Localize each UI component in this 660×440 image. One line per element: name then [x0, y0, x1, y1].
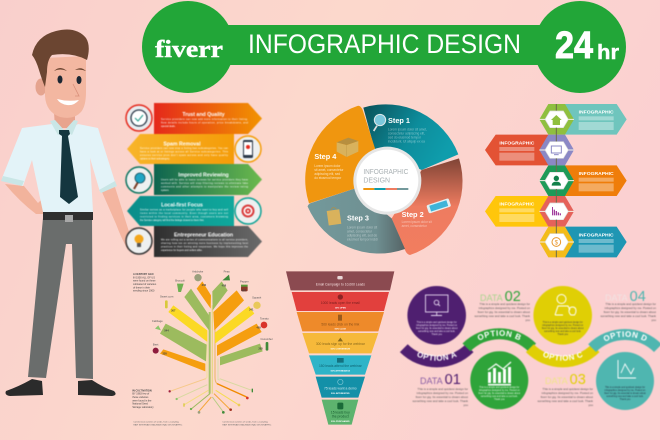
data 02: something new and take a cool look. Thank: [474, 314, 531, 318]
circle: option B: This is a simple and quickest design for: [479, 386, 520, 389]
circle: option D: [596, 352, 654, 410]
data 04: DATA 04: [605, 289, 646, 305]
vegetable labels: Beet: [153, 342, 159, 346]
circle: option A: fiverr for gig. Its essential to dream about: [416, 327, 458, 330]
step 1 text: [388, 116, 427, 144]
branch values: 544: [164, 328, 169, 332]
center disc: INFOGRAPHIC: [363, 169, 408, 176]
funnel level 7: 15 leads buy: [331, 410, 350, 414]
neck: [54, 112, 75, 128]
funnel level 2: 1000 leads open the email: [321, 301, 360, 305]
right arm: [102, 187, 130, 250]
banner: entrepreneur education: sharing how-tos on winning more business by implementing best: [161, 242, 248, 245]
vegetable icons: [153, 274, 268, 414]
data 01: [412, 372, 469, 407]
funnel level 2: [292, 292, 389, 311]
data 01: infographics designed by me. Posted on: [417, 391, 468, 395]
data 02: This is a simple and quickest design for: [480, 302, 530, 306]
icon: monitor search: [426, 295, 448, 316]
data 02: DATA 02: [480, 289, 521, 305]
step 1 text: incididunt. Ut aliquip ex ea: [388, 140, 425, 144]
icon: dollar coin: $: [555, 240, 559, 246]
banner: improved reviewing: Improved Reviewing: [178, 172, 229, 178]
data 04: This is a simple and quickest design for: [606, 302, 656, 306]
circle: option C: This is a simple and quickest design for: [543, 321, 583, 324]
face: [45, 56, 86, 118]
branch values: 408: [222, 284, 227, 288]
banner: entrepreneur education: practices in their listing and responses. We hope this improves the: [161, 246, 249, 248]
annotation: in the population: were found in the: [132, 399, 152, 402]
step 3 text: [347, 214, 378, 241]
annotation: in the population: those varieties: [132, 396, 149, 399]
funnel level 4: [302, 333, 378, 353]
funnel level 4: 60% CONVERSION: [331, 348, 350, 350]
branch values: 341: [249, 308, 254, 312]
branch values: 307: [171, 308, 176, 312]
banner: local-first focus: restricted to finding services in their area, customers browsing: [140, 216, 229, 218]
icon: monitor: [551, 146, 561, 155]
funnel level 5: [309, 355, 371, 375]
vegetable labels: Cabbage: [152, 319, 163, 323]
circle: option A: This is a simple and quickest design for: [417, 321, 457, 324]
data 01: fiverr for gig. Its essential to dream about: [416, 395, 468, 399]
annotation: in the population: [132, 389, 154, 409]
segment: step 1: [363, 104, 458, 170]
banner: improved reviewing: [154, 164, 262, 195]
row 3: person: INFOGRAPHIC: [579, 171, 614, 177]
banner: spam removal: [127, 134, 234, 164]
step 4 text: do eiusmod tempor: [314, 176, 341, 180]
banner: local-first focus: items within the local community. Even though users are not: [140, 212, 228, 215]
eyes and brows: [54, 68, 86, 84]
step 2 text: [402, 210, 432, 228]
24hr badge: [555, 25, 619, 67]
head: [32, 30, 89, 118]
circle: option D: Thank you: [620, 399, 631, 401]
smile: [57, 99, 79, 105]
circle: option A: Thank you: [431, 334, 443, 336]
banner: improved reviewing: comments and other attempts to manipulate the review rating: [161, 186, 249, 188]
icon: smartphone: [426, 198, 451, 214]
data 02: infographics designed by me. Posted on: [479, 306, 530, 310]
step 1 text: Lorem ipsum dolor sit amet,: [388, 128, 427, 132]
branches: [160, 281, 263, 371]
icon: magnifier: [126, 167, 152, 193]
funnel level 1: Email Campaign to 10,000 Leads: [316, 282, 365, 286]
icon: target: [235, 198, 261, 224]
title: INFOGRAPHIC DESIGN: [248, 29, 521, 59]
banner: spam removal: have a look at or listings across all Service subcategories. This: [140, 150, 229, 154]
data 03: fiverr for gig. Its essential to dream about: [541, 395, 593, 399]
circle: option B: infographics designed by me. Posted on: [479, 389, 520, 392]
banner: improved reviewing: system.: [161, 189, 170, 192]
funnel level 6: [316, 377, 365, 398]
circle: option A: [407, 286, 466, 345]
step 3 text: Step 3: [347, 214, 369, 223]
icon: line chart: [618, 360, 636, 378]
banner: entrepreneur education: Entrepreneur Education: [174, 232, 233, 238]
panel: option circles: [400, 285, 660, 411]
circle: option C: Thank you: [557, 334, 569, 336]
option B band: [462, 328, 536, 352]
vegetable labels: Artichoke: [192, 270, 204, 274]
banner: spam removal: options to their subcategory.: [140, 158, 170, 160]
banner: trust and quality: [154, 103, 262, 134]
banner: spam removal: ensures service pros don't spam across and only have quality: [140, 154, 229, 157]
row 1: home: INFOGRAPHIC: [579, 110, 614, 116]
data 01: you: [463, 403, 468, 407]
branch values: 497: [242, 288, 247, 292]
step 1 text: Step 1: [388, 116, 410, 125]
option A band: [400, 344, 474, 368]
banner: spam removal: Spam Removal: [163, 142, 201, 148]
center disc: [353, 147, 421, 215]
shirt: [2, 124, 116, 212]
hair: [32, 30, 89, 87]
header bar shape: [142, 1, 626, 93]
trunk: [205, 305, 220, 394]
row 4: chart: INFOGRAPHIC: [499, 202, 535, 208]
data 03: [537, 372, 594, 407]
segment: step 3: [308, 188, 405, 253]
banner: trust and quality: special deals.: [161, 125, 176, 128]
annotation: a century ago: [133, 273, 157, 293]
icon: shopping bag: [327, 208, 341, 225]
data 01: This is a simple and quickest design for: [418, 387, 468, 391]
funnel level 5: 50% ATTENDANCE: [331, 369, 351, 372]
row 2: monitor: INFOGRAPHIC: [499, 140, 535, 146]
circle: option D: This is a simple and quickest design for: [605, 386, 645, 389]
step 3 text: eiusmod tempor incidi: [347, 237, 378, 241]
funnel level 3: 50% CLICK: [335, 328, 347, 330]
circle: option D: fiverr for gig. Its essential to dream about: [604, 392, 646, 395]
icon: person: [552, 176, 561, 186]
data 01: DATA 01: [420, 372, 461, 388]
step 4 text: [314, 152, 343, 180]
banner: local-first focus: Similar serves as a marketplace for people who want to buy and sell: [140, 208, 228, 212]
circle: option D: infographics designed by me. Posted on: [605, 389, 646, 392]
step 2 text: Lorem ipsum dolor sit: [402, 220, 432, 224]
icon: light bulb: [126, 228, 152, 254]
step 3 text: adipiscing elit, sed do: [347, 233, 377, 237]
icon: phone: [235, 136, 261, 162]
banner: local-first focus: Local-first Focus: [161, 202, 203, 208]
row 3: person: [539, 165, 627, 196]
panel: step pie diagram: [305, 104, 463, 255]
icon: open box: [337, 138, 358, 157]
icon: bar chart: [552, 207, 561, 215]
header banner: [142, 1, 626, 93]
vegetable labels: Broccoli: [175, 278, 185, 282]
funnel level 7: the product: [332, 414, 349, 418]
icon: house: [551, 115, 562, 125]
option C band: OPTION C: [542, 351, 584, 362]
circle: option C: fiverr for gig. Its essential to dream about: [542, 327, 584, 330]
icon: magnifier: [374, 114, 386, 131]
funnel level 6: 75 leads want a demo: [324, 386, 357, 390]
data 03: something new and take a cool look. Thank: [537, 399, 594, 403]
step 4 text: Step 4: [314, 152, 337, 161]
footnotes: RAFI INTERNATIONAL/NATIONAL GEOGRAPHIC: [222, 423, 272, 426]
circle: option D: something new and take a cool look.: [606, 395, 644, 398]
row 5: coin: [539, 227, 627, 257]
trousers: [28, 218, 93, 379]
step 1 text: consectetur adipiscing elit,: [388, 132, 425, 136]
data 03: infographics designed by me. Posted on: [542, 391, 593, 395]
step 4 text: Lorem ipsum dolor: [314, 164, 340, 168]
step 2 text: amet, consectetur: [402, 224, 427, 228]
funnel level 7: 20% PURCHASED: [331, 420, 350, 423]
annotation: a century ago: of these in their: [133, 286, 150, 289]
belt: [43, 212, 93, 222]
nose: [73, 84, 79, 96]
option B band: OPTION B: [477, 330, 522, 341]
annotation: a century ago: IN 1900 ALL OF US: [133, 276, 155, 279]
row 2: monitor: [485, 135, 574, 165]
row 4: chart: [485, 196, 574, 227]
data 02: you: [525, 318, 530, 322]
footnotes: Commercial varieties of seeds, from a sampling: [133, 421, 180, 424]
row 5: coin: INFOGRAPHIC: [579, 232, 614, 238]
annotation: in the population: IN CULTIVATION: [132, 389, 152, 392]
banner: entrepreneur education: We are rolling out a series of communications to all service providers,: [161, 238, 248, 242]
funnel level 1: [286, 271, 394, 290]
banner: entrepreneur education: experience for buyers and sellers alike.: [161, 249, 203, 252]
vegetable labels: Sweet corn: [160, 295, 174, 299]
fiverr logo: fiverr: [155, 37, 223, 63]
step 4 text: sit amet, consectetur: [314, 168, 343, 172]
roots: [170, 379, 252, 412]
step 3 text: Lorem ipsum dolor sit: [347, 225, 377, 229]
footnotes: RAFI INTERNATIONAL/NATIONAL GEOGRAPHIC: [133, 423, 183, 426]
banner: trust and quality: Trust and Quality: [182, 112, 225, 118]
panel: feature banners: [126, 103, 262, 257]
row 1: home: [539, 104, 627, 135]
panel: sales funnel: [286, 271, 394, 425]
banner: spam removal: Service providers can now stop a listing ban subcategories. You can: [140, 147, 229, 150]
24hr badge: 24: [555, 25, 593, 67]
ear: [36, 78, 46, 96]
vegetable labels: Pepper: [240, 280, 249, 284]
circle: option C: [533, 286, 592, 345]
footnotes: [133, 421, 272, 426]
circle: option A: infographics designed by me. Posted on: [416, 324, 458, 327]
circle: option C: something new and take a cool look.: [544, 330, 582, 333]
businessman illustration: [1, 30, 130, 396]
branch values: 408: [256, 326, 261, 330]
data 03: you: [588, 403, 593, 407]
option A band: OPTION A: [416, 352, 458, 362]
data 04: something new and take a cool look. Thank: [600, 314, 657, 318]
data 01: something new and take a cool look. Thank: [412, 399, 469, 403]
funnel level 3: [297, 312, 384, 331]
branch values: 285: [258, 346, 263, 350]
funnel level 7: [322, 400, 358, 425]
vegetable labels: Squash: [252, 296, 262, 300]
banner: local-first focus: the Service category will find the listings closest to them first.: [140, 219, 205, 222]
footnotes: Commercial varieties of seeds, from a sampling: [222, 421, 269, 424]
option D band: OPTION D: [603, 330, 648, 342]
option D band: [588, 328, 660, 352]
circle: option C: infographics designed by me. Posted on: [542, 324, 584, 327]
data 04: you: [651, 318, 656, 322]
banner: trust and quality: Service providers can now add more information to their listing.: [161, 118, 248, 121]
annotation: in the population: BY 1983 few of: [132, 393, 149, 396]
data 04: infographics designed by me. Posted on: [605, 306, 656, 310]
vegetable labels: Peas: [224, 270, 230, 274]
funnel level 4: 300 leads sign up for the webinar: [316, 342, 366, 346]
circle: option B: fiverr for gig. Its essential to dream about: [478, 392, 520, 395]
sleeve cuffs: [1, 176, 117, 193]
annotation: a century ago: seeding since 1900: [133, 290, 155, 293]
left arm: [5, 184, 49, 214]
step 4 text: adipiscing elit, sed: [314, 172, 340, 176]
segment: step 2: [392, 158, 463, 255]
banner: trust and quality: New details include hours of operation, price breakdowns, and: [161, 122, 249, 124]
24hr badge: hr: [597, 42, 619, 64]
banner: entrepreneur education: [154, 226, 262, 257]
funnel level 5: 150 leads attend the webinar: [319, 364, 363, 368]
banner: local-first focus: [127, 196, 234, 226]
annotation: a century ago: A CENTURY AGO: [133, 273, 154, 276]
annotation: in the population: National Seed: [132, 403, 149, 406]
step 3 text: amet, consectetur: [347, 229, 372, 233]
data 02: fiverr for gig. Its essential to dream about: [478, 310, 530, 314]
center disc: DESIGN: [363, 178, 390, 185]
data 02: [474, 289, 531, 322]
panel: hexagon chain: [485, 104, 627, 257]
tie: [59, 130, 78, 204]
shoes: [6, 379, 116, 396]
funnel level 2: 10% OPEN: [335, 308, 346, 310]
data 03: This is a simple and quickest design for: [543, 387, 593, 391]
annotation: a century ago: cultivated of varieties: [133, 283, 157, 286]
circle: option B: something new and take a cool look.: [481, 395, 518, 398]
icon: growth chart: [488, 362, 511, 386]
panel: vegetable tree chart: [132, 270, 273, 426]
data 03: DATA 03: [545, 372, 586, 388]
circle: option B: [470, 351, 528, 409]
step 1 text: sed do eiusmod tempor: [388, 136, 421, 140]
banner: improved reviewing: worked with. Service will stop filtering reviews to eliminate fake: [161, 182, 249, 185]
vegetable labels: [152, 270, 273, 346]
branch values: [162, 283, 263, 355]
banner: improved reviewing: Users will be able to leave reviews for service providers they have: [161, 178, 249, 182]
circle: option A: something new and take a cool look.: [418, 330, 456, 333]
vegetable labels: Tomato: [260, 316, 269, 320]
data 04: fiverr for gig. Its essential to dream about: [604, 310, 656, 314]
segment: step 4: [305, 106, 375, 203]
circle: option B: Thank you: [494, 399, 505, 401]
vegetable labels: Cucumber: [261, 337, 273, 341]
funnel level 3: 500 leads click on the link: [321, 322, 360, 326]
branch values: 230: [202, 283, 207, 287]
collar: [50, 120, 78, 135]
icon: person with idea: [555, 294, 576, 315]
step 2 text: Step 2: [402, 210, 424, 219]
funnel level 6: 50% INTERESTED: [331, 393, 350, 395]
branch values: 338: [162, 351, 167, 355]
annotation: in the population: Storage Laboratory: [132, 406, 154, 409]
option C band: [526, 344, 600, 368]
icon: clock: [126, 105, 152, 131]
data 04: [600, 289, 657, 322]
annotation: a century ago: were found on these: [133, 280, 156, 283]
